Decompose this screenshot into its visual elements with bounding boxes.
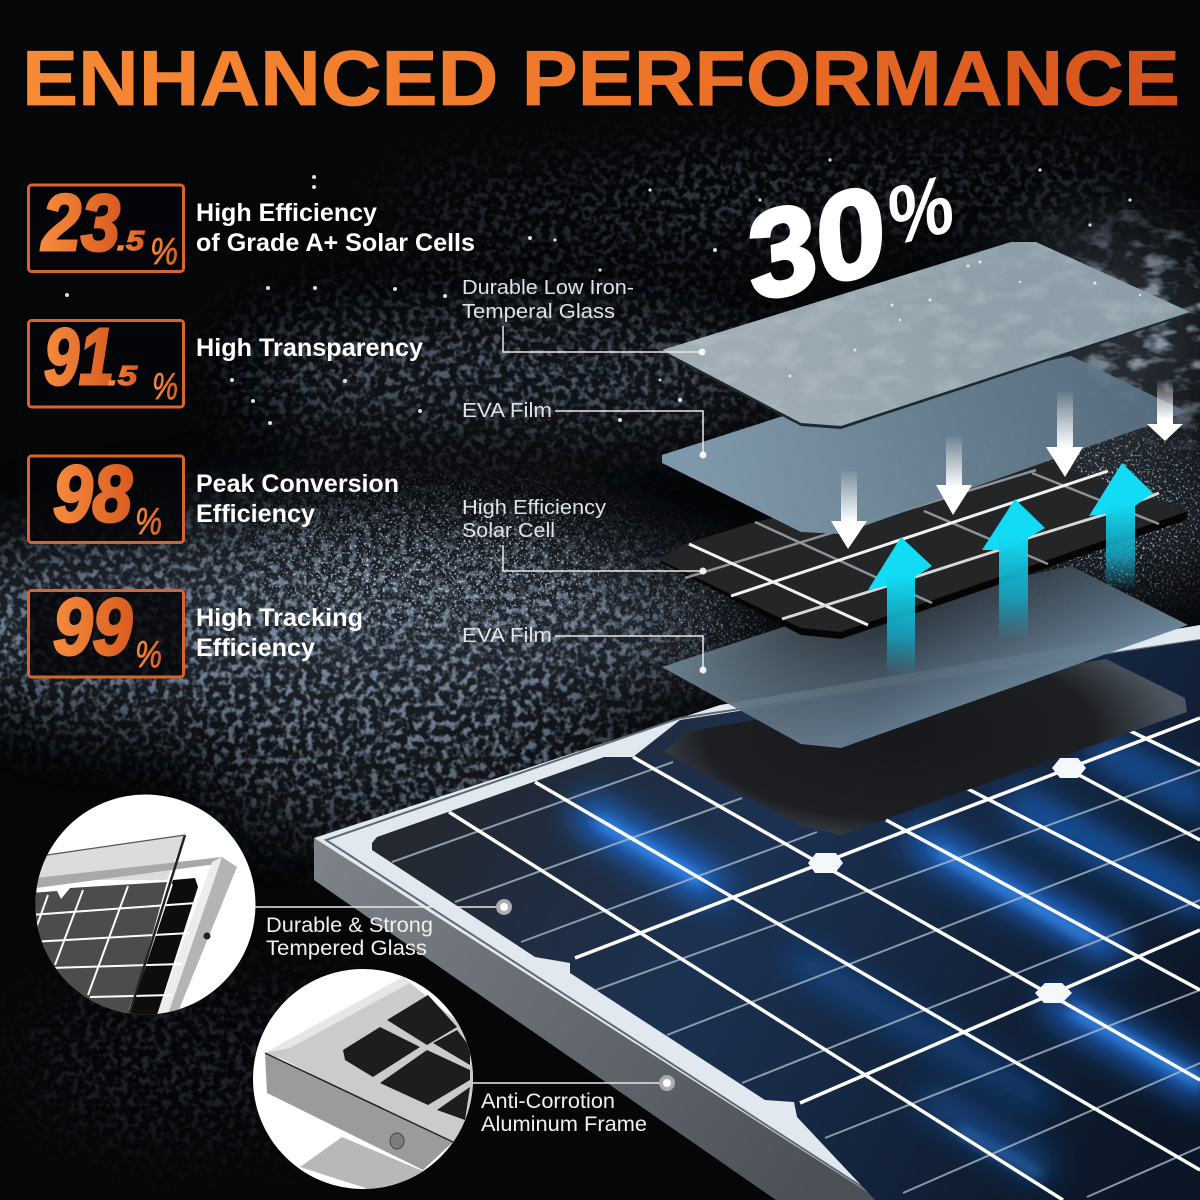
30% heading (730, 143, 970, 327)
panel frame side (314, 838, 880, 1200)
label: EVA film upper (462, 400, 706, 458)
stat label: Efficiency (196, 634, 315, 662)
stat label (196, 199, 475, 257)
stat label: Peak Conversion (196, 470, 399, 498)
white down arrows (831, 380, 1183, 549)
callout: aluminum frame: Aluminum Frame (481, 1113, 647, 1136)
label: high efficiency solar cell: Solar Cell (462, 520, 555, 542)
label: EVA film upper: EVA Film (462, 400, 552, 422)
stat box (28, 320, 184, 407)
callout: aluminum frame: Anti-Corrotion (481, 1090, 615, 1113)
panel cells (340, 620, 1200, 1200)
stat value: 91 (44, 312, 114, 401)
stat: 98% peak conversion (28, 449, 399, 543)
stat value: % (135, 634, 162, 676)
label: low iron tempered glass: Durable Low Iron- (462, 277, 634, 299)
label: low iron tempered glass: Temperal Glass (462, 301, 615, 323)
stat label (196, 470, 399, 528)
30% heading: % (877, 159, 963, 263)
callout: aluminum frame (473, 1075, 675, 1136)
circle detail: tempered glass (30, 794, 256, 1015)
stat label: of Grade A+ Solar Cells (196, 229, 475, 257)
stat: 23.5% high efficiency (28, 178, 475, 273)
layer: solar cell (660, 457, 1188, 639)
stat value: % (150, 231, 178, 273)
stat label: High Efficiency (196, 199, 377, 227)
stat value: 23 (40, 178, 120, 267)
thick grid lines (449, 718, 1200, 1200)
30% heading: 30 (730, 161, 899, 327)
dark shadow of stacked layers (664, 659, 1187, 835)
stat value (40, 178, 178, 273)
stat box (28, 590, 184, 677)
stat box (28, 456, 184, 542)
circle detail: aluminum frame (253, 969, 480, 1195)
solar panel (314, 620, 1200, 1200)
stat value: 98 (53, 449, 132, 538)
layer: low iron tempered glass (660, 240, 1195, 430)
panel frame surface (314, 625, 1200, 1200)
label: high efficiency solar cell: High Efficiency (462, 497, 606, 519)
label: EVA film lower: EVA Film (462, 625, 552, 647)
stat: 99% high tracking (28, 582, 363, 677)
label: high efficiency solar cell (462, 497, 706, 574)
stat: 91.5% high transparency (28, 312, 423, 408)
label: EVA film lower (462, 625, 706, 674)
stat box (28, 185, 184, 272)
layer: upper EVA film (662, 356, 1187, 534)
stat label (196, 604, 363, 662)
thin grid lines (392, 762, 1200, 1197)
stat label: High Tracking (196, 604, 363, 632)
stat value: .5 (108, 360, 138, 391)
callout: durable tempered glass: Durable & Strong (266, 914, 433, 937)
stat value: 99 (53, 582, 132, 671)
stat label: Efficiency (196, 500, 315, 528)
stat value: .5 (117, 225, 144, 256)
title: ENHANCED PERFORMANCE (22, 34, 1180, 122)
stat value: % (135, 501, 162, 543)
cell junction nodes (808, 758, 1086, 1003)
callout: durable tempered glass: Tempered Glass (266, 937, 427, 960)
label: low iron tempered glass (462, 277, 706, 356)
stat label: High Transparency (196, 334, 423, 362)
stat value: % (152, 366, 178, 408)
callout: durable tempered glass (255, 899, 512, 960)
stat value (44, 312, 178, 408)
layer: lower EVA film (662, 566, 1188, 748)
cyan up arrows (868, 463, 1153, 676)
